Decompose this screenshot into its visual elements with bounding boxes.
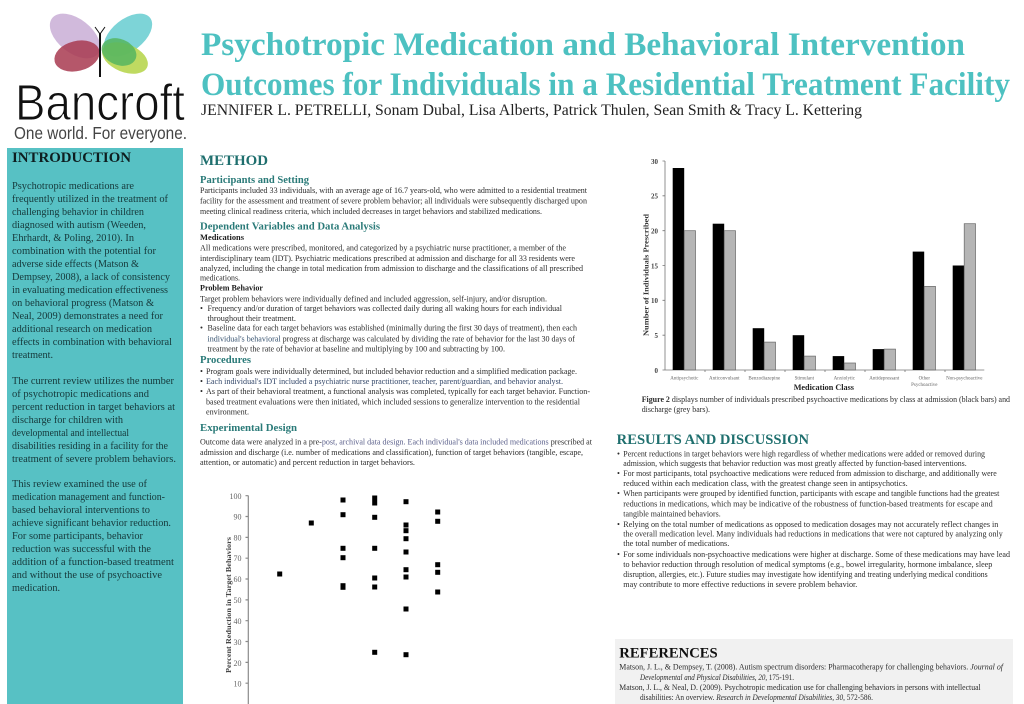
x axis title: Medication Class [794, 382, 855, 392]
text block: findings list: the total number of medications. [623, 539, 729, 548]
category labels: Anxiolytic [834, 376, 856, 382]
heading: results and discussion: RESULTS AND DISCUSSION [617, 432, 810, 448]
text block: intro paragraph 3 [12, 479, 174, 594]
section: participants and setting: Participants and Setting [200, 174, 309, 186]
text block: intro paragraph 1: diagnosed with autism (Weeden, [12, 220, 146, 231]
category labels: Other [919, 376, 930, 382]
section: experimental design: admission and discharge (i.e. number of medications and classification), function of target behaviors (tangible, escape, [200, 448, 583, 457]
text block: intro paragraph 1: challenging behavior in children [12, 207, 145, 218]
y axis tick labels: 20 [651, 228, 658, 236]
text block: intro paragraph 3: achieve significant behavior reduction. [12, 518, 171, 529]
text block: findings list: • [617, 489, 620, 498]
wordmark: Bancroft [15, 74, 185, 131]
text block: findings list: When participants were grouped by identified function, participants with escape and tangible functions had the greatest [623, 489, 1000, 498]
text block: findings list [617, 450, 1011, 589]
text block: intro paragraph 2: percent reduction in target behaviors at [12, 402, 175, 413]
section: dependent variables and data analysis: throughout their treatment. [208, 314, 296, 323]
authors: JENNIFER L. PETRELLI, Sonam Dubal, Lisa Alberts, Patrick Thulen, Sean Smith & Tracy L. Kettering [201, 102, 862, 119]
text block: intro paragraph 3: medication management and function- [12, 492, 166, 503]
category labels: Antipsychotic [670, 376, 699, 382]
text block: findings list: may contribute to more effective reductions in severe problem behavior. [623, 580, 857, 589]
text block: intro paragraph 1: additional research on medication [12, 324, 153, 335]
category labels: Anticonvulsant [709, 376, 740, 382]
reference entry: Matson and Dempsey: Developmental and Physical Disabilities, 20, 175-191. [639, 673, 794, 682]
section: dependent variables and data analysis: • [200, 304, 203, 313]
section: dependent variables and data analysis: treatment by the rate of behavior at baseline and multiplying by 100 and subtracting by 100. [208, 344, 505, 354]
data points [277, 496, 440, 657]
y axis tick labels: 10 [234, 680, 242, 688]
reference entry: Matson and Dempsey: Matson, J. L., & Dempsey, T. (2008). Autism spectrum disorders: Pharmacotherapy for challenging behaviors. Journal of [619, 662, 1005, 672]
text block: findings list: admission, which suggests that behavior reduction was most greatly affected by function-based interventions. [623, 459, 967, 468]
section: experimental design [200, 422, 593, 467]
category labels: Antidepressant [869, 376, 900, 382]
tagline: One world. For everyone. [14, 123, 187, 143]
section: dependent variables and data analysis [200, 220, 584, 354]
icon: butterfly [42, 5, 160, 80]
text block: intro paragraph 3: medication. [12, 583, 60, 594]
section: participants and setting: meeting clinical readiness criteria, which included decreases in target behaviors and stabilized medications. [200, 207, 542, 216]
logo: Bancroft butterfly and wordmark [14, 5, 187, 143]
text block: findings list: • [617, 550, 620, 559]
section: procedures: environment. [206, 408, 249, 416]
category labels: Benzodiazepine [748, 376, 781, 382]
text block: intro paragraph 2: developmental and intellectual [12, 428, 129, 439]
text block: intro paragraph 1: Psychotropic medications are [12, 181, 134, 192]
section: procedures: • [200, 377, 203, 386]
admission bars [673, 168, 964, 370]
category labels: Stimulant [795, 376, 815, 382]
text block: intro paragraph 3: reduction was successful with the [12, 544, 151, 555]
reference entry: Matson and Neal [619, 683, 981, 702]
y axis tick labels: 30 [234, 638, 242, 647]
y axis [246, 496, 248, 704]
section: participants and setting: facility for the assessment and treatment of severe problem behavior; all individuals were subsequently discharged upon [200, 196, 588, 206]
text block: findings list: • [617, 469, 620, 478]
section: participants and setting [200, 174, 588, 216]
section: procedures: • [200, 367, 203, 376]
section: participants and setting: Participants included 33 individuals, with an average age of 16.7 years-old, who were admitted to a residential treatment [200, 186, 588, 195]
reference entry: Matson and Neal: disabilities: An overview. Research in Developmental Disabilities, 30, 572-586. [640, 693, 873, 702]
text block: findings list: Percent reductions in target behaviors were high regardless of whether medications were added or removed during [623, 450, 986, 458]
text block: intro paragraph 3: For some participants, behavior [12, 531, 144, 542]
section: dependent variables and data analysis: analyzed, including the change in total medication from admission to discharge and the classifications of all prescribed [200, 264, 584, 273]
text block: intro paragraph 1: Ehrhardt, & Poling, 2010). In [12, 233, 135, 244]
figure 2 caption [642, 395, 1011, 414]
title [201, 27, 1010, 103]
text block: findings list: • [617, 520, 620, 529]
axes [662, 161, 984, 372]
text block: intro paragraph 1: in evaluating medication effectiveness [12, 285, 168, 296]
section: procedures: • [200, 387, 203, 396]
category labels [670, 376, 983, 388]
y axis tick labels [651, 158, 658, 375]
text block: intro paragraph 3: and without the use of psychoactive [12, 570, 162, 581]
y axis tick labels: 60 [234, 575, 242, 584]
y axis tick labels: 30 [651, 158, 658, 166]
text block: intro paragraph 1: treatment. [12, 350, 53, 361]
y axis tick labels: 80 [234, 534, 242, 542]
heading: references: REFERENCES [619, 646, 718, 662]
heading: introduction: INTRODUCTION [12, 150, 132, 166]
text block: intro paragraph 2: of psychotropic medications and [12, 389, 150, 400]
text block: findings list: tangible maintained behaviors. [623, 510, 721, 518]
section: procedures: As part of their behavioral treatment, a functional analysis was completed, typically for each target behavior. Function- [206, 387, 590, 396]
section: dependent variables and data analysis: Problem Behavior [200, 284, 263, 292]
text block: findings list: Relying on the total number of medications as opposed to medication dosages may not accurately reflect changes in [623, 520, 999, 529]
panel: introduction [7, 148, 183, 704]
section: dependent variables and data analysis: interdisciplinary team (IDT). Psychiatric medications prescribed at admission and discharge for all 33 residents were [200, 254, 575, 263]
y axis tick labels: 0 [654, 367, 658, 375]
section: experimental design: attention, or automatic) and percent reduction in target behaviors. [200, 458, 415, 467]
text block: findings list: For most participants, total psychoactive medications were reduced from admission to discharge, and additionally were [623, 469, 997, 478]
title: Psychotropic Medication and Behavioral Intervention [201, 27, 965, 63]
text block: intro paragraph 3: addition of a function-based treatment [12, 557, 174, 568]
text block: intro paragraph 1: adverse side effects (Matson & [12, 259, 139, 270]
section: dependent variables and data analysis: Medications [200, 233, 245, 242]
text block: intro paragraph 2: The current review utilizes the number [12, 376, 175, 387]
section: procedures: based treatment evaluations were then initiated, which included sessions to generalize intervention to the residential [206, 398, 581, 406]
y axis title: Number of Individuals Prescribed [642, 213, 650, 336]
text block: intro paragraph 3: This review examined the use of [12, 479, 148, 490]
y axis tick labels: 25 [651, 192, 658, 200]
y axis tick labels [230, 492, 242, 688]
section: procedures: Procedures [200, 354, 252, 366]
text block: findings list: For some individuals non-psychoactive medications were higher at discharge. Some of these medications may have lead [623, 550, 1011, 559]
y axis tick labels: 40 [234, 617, 242, 626]
section: dependent variables and data analysis: Dependent Variables and Data Analysis [200, 220, 381, 232]
section: dependent variables and data analysis: Frequency and/or duration of target behaviors was collected daily during all waking hours for each individual [208, 304, 563, 313]
text block: intro paragraph 3: based behavioral interventions to [12, 505, 150, 516]
y axis tick labels: 70 [234, 554, 242, 563]
category labels: Psychoactive [911, 383, 938, 388]
reference entry: Matson and Dempsey [619, 662, 1005, 682]
text block: intro paragraph 2 [12, 376, 176, 465]
section: dependent variables and data analysis: individual's behavioral progress at discharge was calculated by dividing the rate of behavior for the last 30 days of [208, 334, 575, 344]
panel: results and discussion [617, 432, 1011, 589]
text block: intro paragraph 1 [12, 181, 172, 361]
section: experimental design: Outcome data were analyzed in a pre-post, archival data design. Each individual's data included medications prescribed at [200, 438, 593, 446]
section: dependent variables and data analysis: medications. [200, 274, 240, 282]
section: experimental design: Experimental Design [200, 422, 297, 434]
figure 2 caption: Figure 2 displays number of individuals prescribed psychoactive medications by class at admission (black bars) and [642, 395, 1011, 404]
y axis tick labels: 10 [651, 297, 658, 305]
text block: findings list: disruption, allergies, etc.). Future studies may investigate how identifying and treating underlying medical conditions [623, 570, 988, 579]
heading: method: METHOD [200, 153, 268, 169]
y axis tick labels: 100 [230, 492, 242, 501]
panel: method [200, 153, 593, 467]
y axis tick labels: 90 [234, 512, 242, 522]
y axis title: Percent Reduction in Target Behaviors [224, 537, 233, 673]
text block: intro paragraph 2: treatment of severe problem behaviors. [12, 454, 176, 465]
text block: intro paragraph 2: discharge for children with [12, 415, 124, 426]
text block: intro paragraph 1: effects in combination with behavioral [12, 337, 172, 348]
scatter chart: percent reduction in target behaviors [224, 492, 440, 704]
section: dependent variables and data analysis: Baseline data for each target behaviors was established (minimally during the first 30 days of treatment), then each [208, 324, 578, 332]
section: dependent variables and data analysis: All medications were prescribed, monitored, and categorized by a psychiatric nurse practitioner, a member of the [200, 244, 566, 252]
text block: findings list: • [617, 450, 620, 458]
section: procedures: Each individual's IDT included a psychiatric nurse practitioner, teacher, parent/guardian, and behavior analyst. [206, 377, 563, 386]
text block: findings list: the overall medication level. Many individuals had reductions in medications that were not captured by analyzing only [623, 530, 1003, 538]
section: procedures [200, 354, 590, 416]
section: dependent variables and data analysis: Target problem behaviors were individually defined and included aggression, self-injury, and/or disruption. [200, 294, 547, 304]
text block: intro paragraph 1: frequently utilized in the treatment of [12, 194, 169, 205]
reference entry: Matson and Neal: Matson, J. L., & Neal, D. (2009). Psychotropic medication use for challenging behaviors in persons with intellectual [619, 683, 981, 692]
section: dependent variables and data analysis: • [200, 324, 203, 332]
text block: intro paragraph 2: disabilities residing in a facility for the [12, 441, 168, 452]
category labels: Non-psychoactive [946, 376, 983, 382]
panel: references [615, 639, 1013, 704]
y axis tick labels: 20 [234, 659, 242, 668]
text block: findings list: reductions in medications, which may be indicative of the robustness of function-based treatments for escape and [623, 500, 993, 508]
text block: findings list: reduced within each medication class, with the greatest change seen in antipsychotics. [623, 479, 908, 488]
y axis tick labels: 50 [234, 596, 242, 605]
discharge bars [684, 224, 976, 370]
text block: intro paragraph 1: Neal, 2009) demonstrates a need for [12, 311, 164, 322]
y axis tick labels: 5 [654, 332, 658, 340]
text block: intro paragraph 1: on behavioral progress (Matson & [12, 298, 154, 309]
bar chart: medication class [642, 158, 984, 392]
section: procedures: Program goals were individually determined, but included behavior reduction and a simplified medication package. [206, 367, 577, 376]
figure 2 caption: discharge (grey bars). [642, 405, 710, 414]
text block: intro paragraph 1: combination with the potential for [12, 246, 157, 257]
text block: findings list: to behavior reduction through resolution of medical symptoms (e.g., bowel irregularity, hormone imbalance, sleep [623, 560, 992, 569]
text block: intro paragraph 1: Dempsey, 2008), a lack of consistency [12, 272, 171, 283]
y axis tick labels: 15 [651, 262, 658, 270]
